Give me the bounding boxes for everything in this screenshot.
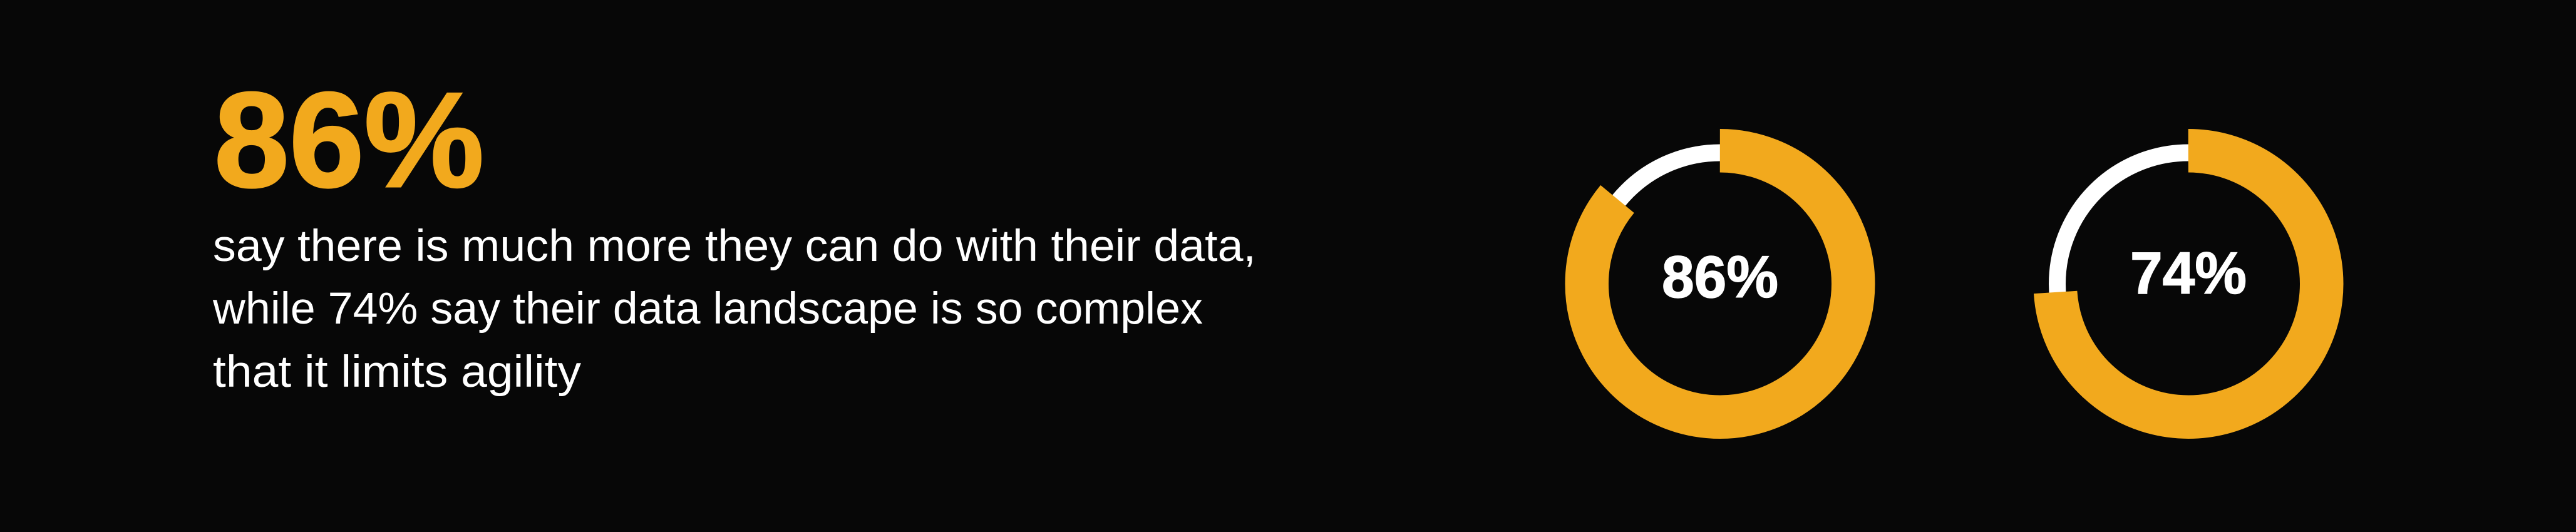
description text block: say there is much more they can do with their data,: [213, 222, 1256, 271]
description text block: while 74% say their data landscape is so complex: [212, 284, 1203, 334]
donut chart: 74%: [2055, 151, 2322, 417]
description text block: that it limits agility: [213, 347, 582, 397]
donut chart: 86%: 86%: [1662, 244, 1778, 310]
description text block: [212, 222, 1256, 397]
headline statistic: 86%: 86%: [214, 64, 484, 215]
donut chart: 86%: [1587, 151, 1853, 417]
donut chart: 74%: 74%: [2130, 240, 2247, 307]
